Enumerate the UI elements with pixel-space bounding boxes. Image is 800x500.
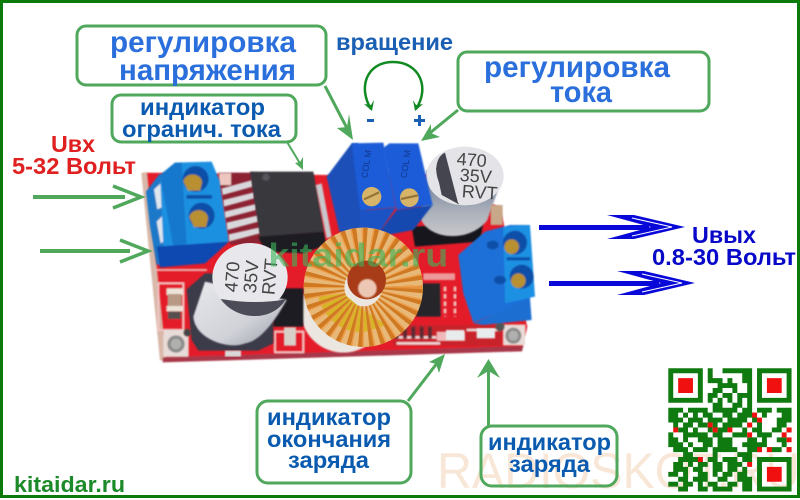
component: right trimmer: COL M [399,149,413,179]
component: right terminal block [458,225,535,325]
arrow: current trimmer [421,110,458,141]
component: left capacitor: 35V [239,259,263,294]
output voltage label: Uвых [692,222,756,248]
label box: current adjustment: тока [550,76,612,109]
label box: voltage adjustment: напряжения [119,54,296,87]
photo: charger board [141,143,535,362]
component: right capacitor: RVT [461,181,498,204]
arrow: current limit indicator [287,142,303,170]
label box: current adjustment [458,51,709,111]
input arrow 2 [40,240,148,262]
label box: charge end indicator: окончания [267,426,391,452]
label box: charge end indicator [257,401,411,483]
QR code [668,368,792,492]
component: power IC [250,172,332,253]
label box: current limit indicator: индикатор [140,94,265,120]
output arrow 1 [539,215,685,239]
component: left capacitor: RVT [257,258,282,296]
input voltage label [12,131,136,179]
component: right capacitor [412,147,504,247]
input arrow 1 [33,186,141,208]
component: left capacitor [187,243,303,357]
component: right capacitor: 470 [456,149,487,171]
label box: charge end indicator: заряда [288,447,369,473]
watermark: kitaidar on board: kitaidar.ru [268,238,448,275]
board PCB [141,172,527,362]
arrow: charging indicator [477,359,500,426]
rotation label: вращение [336,29,453,55]
output voltage label [652,222,796,270]
label box: charging indicator [481,426,617,486]
label box: charge end indicator: индикатор [267,404,391,430]
icon: rotation arc [364,62,423,111]
label box: charging indicator: заряда [509,451,590,477]
input voltage label: Uвх [51,131,95,157]
component: right capacitor: 35V [459,165,492,187]
component: left trimmer [327,143,396,232]
component: left trimmer: COL M [359,149,373,179]
arrow: charge end indicator [408,354,445,401]
component: right trimmer [378,143,433,235]
minus sign [367,119,374,122]
label box: voltage adjustment [77,26,326,87]
label box: charging indicator: индикатор [488,429,611,455]
component: small IC [416,273,455,317]
label box: current adjustment: регулировка [484,51,670,84]
component: status LEDs [437,328,495,341]
website label: kitaidar.ru [14,472,125,497]
arrow: voltage trimmer [325,86,353,140]
plus sign [414,115,425,126]
output voltage label: 0.8-30 Вольт [652,244,796,270]
component: toroid inductor [301,248,403,353]
output arrow 2 [549,271,695,295]
component: left terminal block [146,162,229,267]
component: IC pins [222,180,260,241]
label box: current limit indicator [112,94,296,142]
input voltage label: 5-32 Вольт [12,153,136,179]
label box: voltage adjustment: регулировка [110,26,296,59]
component: left capacitor: 470 [220,261,244,293]
label box: current limit indicator: огранич. тока [122,116,281,142]
